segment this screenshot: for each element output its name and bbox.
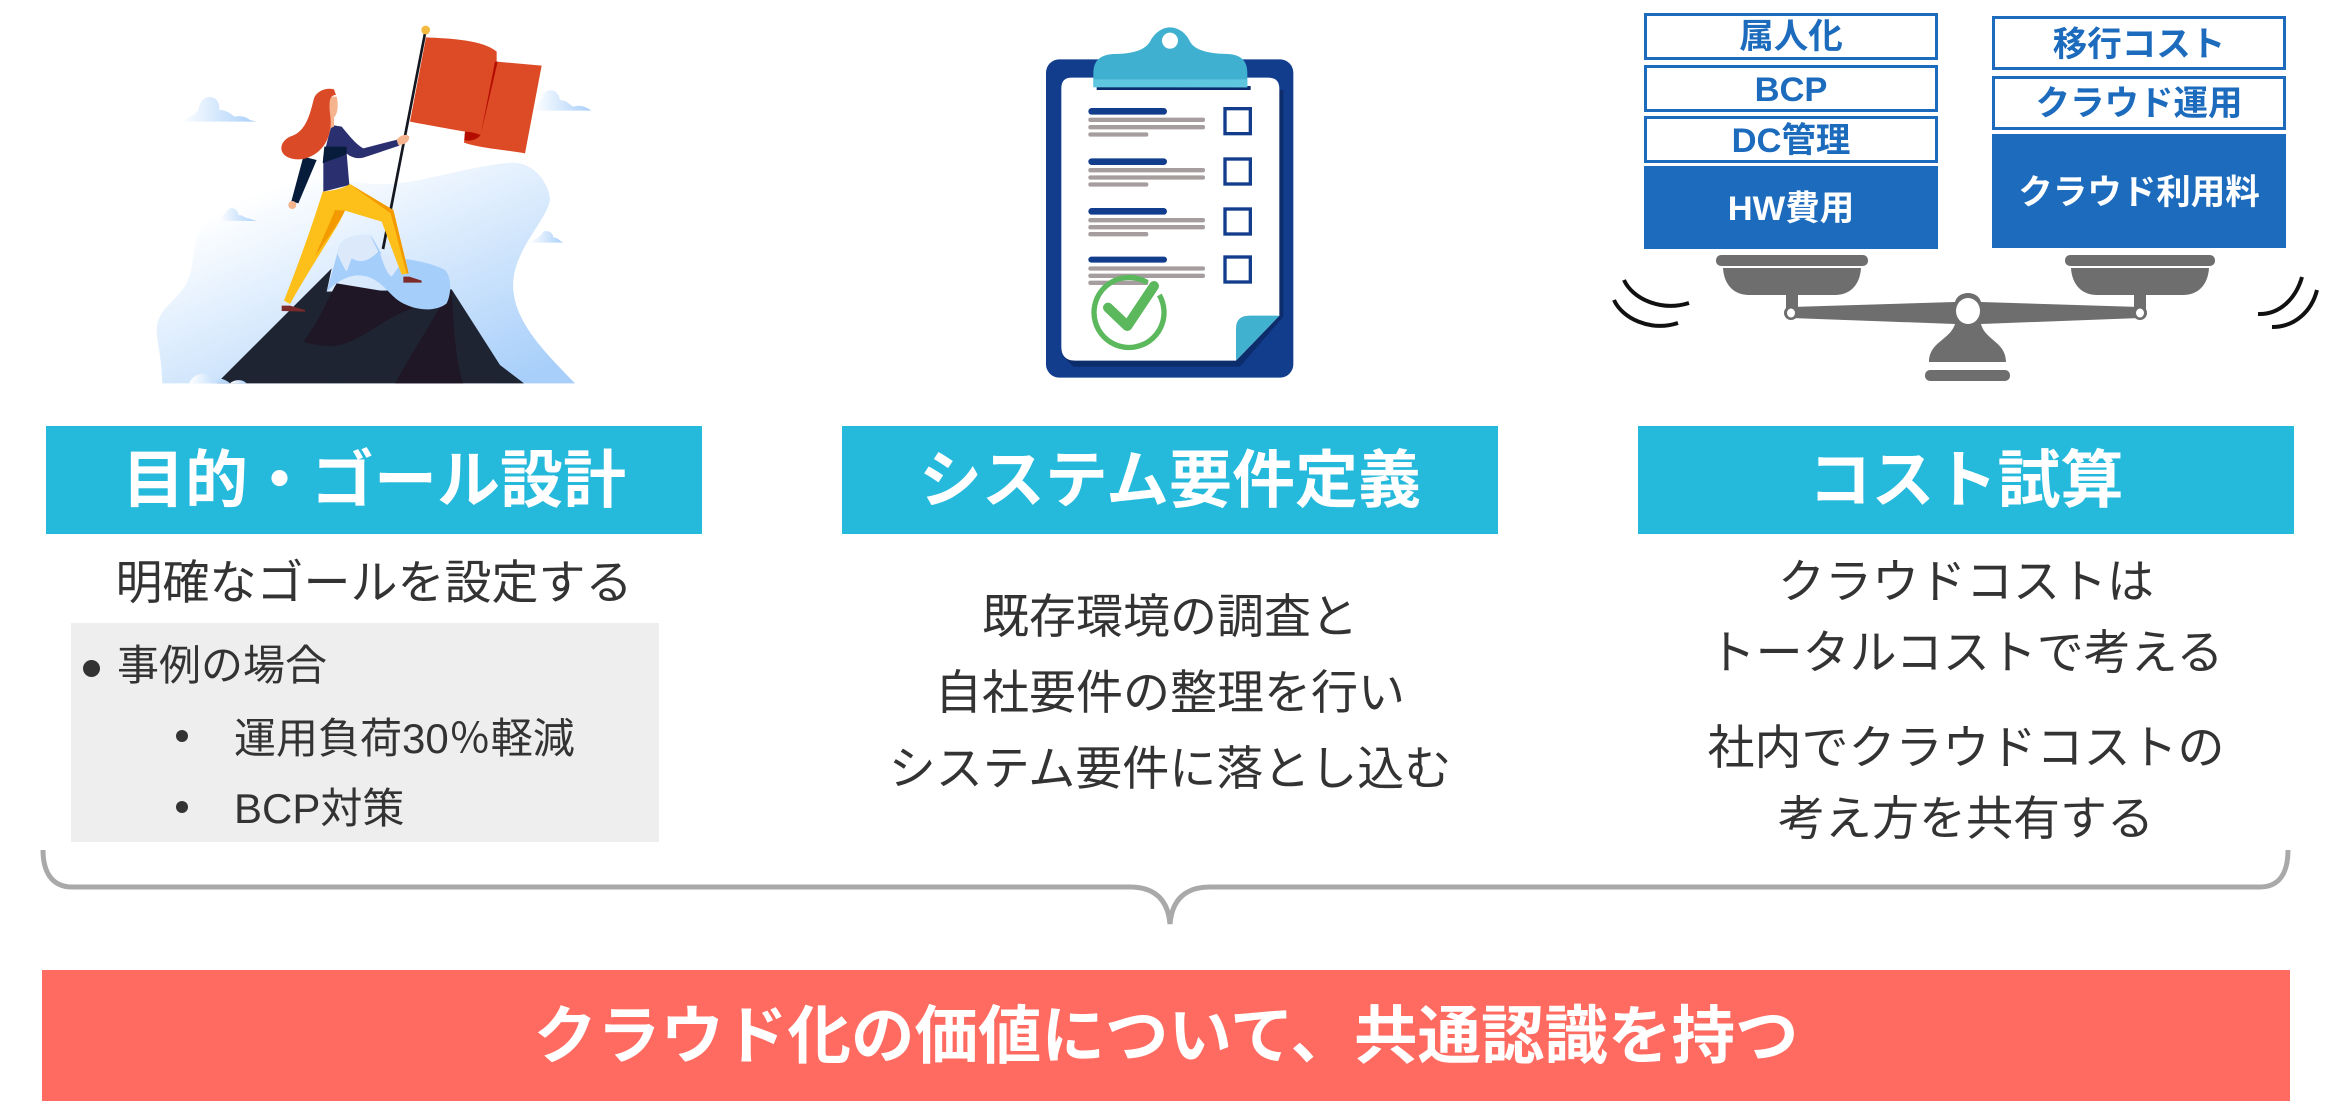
heading: システム要件定義: システム要件定義 [919, 446, 1421, 516]
text: share cost thinking [1708, 721, 2224, 845]
text: share cost thinking: 考え方を共有する [1778, 792, 2154, 845]
text: requirements description: 自社要件の整理を行い [935, 666, 1405, 719]
bullet: 運用負荷 [176, 730, 188, 742]
banner: conclusion [42, 970, 2290, 1101]
heading: コスト試算: コスト試算 [1808, 446, 2124, 516]
text: requirements description [889, 590, 1451, 795]
cost box: クラウド利用料: クラウド利用料 [2018, 174, 2260, 212]
banner: conclusion: クラウド化の価値について、共通認識を持つ [534, 1002, 1798, 1072]
text: total cost [1709, 555, 2223, 679]
text: share cost thinking: 社内でクラウドコストの [1708, 721, 2224, 774]
text: total cost: クラウドコストは [1778, 555, 2154, 608]
icon: balance scale [1612, 255, 2319, 381]
cost box: クラウド利用料 [1992, 134, 2286, 248]
text: BCP対策: BCP対策 [234, 785, 404, 832]
text: total cost: トータルコストで考える [1709, 626, 2223, 679]
panel: case example [71, 623, 659, 842]
cost box: BCP: BCP [1755, 71, 1827, 109]
cost box: クラウド運用 [1992, 76, 2286, 130]
cost box: DC管理: DC管理 [1732, 122, 1850, 160]
heading: システム要件定義 [842, 426, 1498, 534]
heading: コスト試算 [1638, 426, 2294, 534]
bullet: 事例の場合 [83, 660, 100, 677]
cost box: BCP [1644, 65, 1938, 112]
text: 事例の場合: 事例の場合 [117, 642, 327, 689]
icon: climber with flag on mountain [156, 26, 592, 384]
icon: clipboard checklist [1046, 27, 1294, 378]
text: 運用負荷30％軽減: 運用負荷30％軽減 [234, 715, 575, 762]
cost box: 移行コスト [1992, 16, 2286, 70]
cost box: HW費用 [1644, 166, 1938, 249]
cost box: 属人化: 属人化 [1739, 18, 1843, 56]
text: 明確なゴールを設定する: 明確なゴールを設定する [116, 556, 632, 609]
heading: 目的・ゴール設計 [46, 426, 702, 534]
bullet: BCP対策 [176, 801, 188, 813]
text: requirements description: システム要件に落とし込む [889, 742, 1451, 795]
cost box: HW費用: HW費用 [1728, 190, 1854, 228]
cost box: 移行コスト: 移行コスト [2053, 26, 2225, 64]
heading: 目的・ゴール設計: 目的・ゴール設計 [122, 446, 626, 516]
cost box: 属人化 [1644, 13, 1938, 60]
text: requirements description: 既存環境の調査と [982, 590, 1358, 643]
cost box: DC管理 [1644, 116, 1938, 163]
cost box: クラウド運用: クラウド運用 [2036, 85, 2242, 123]
